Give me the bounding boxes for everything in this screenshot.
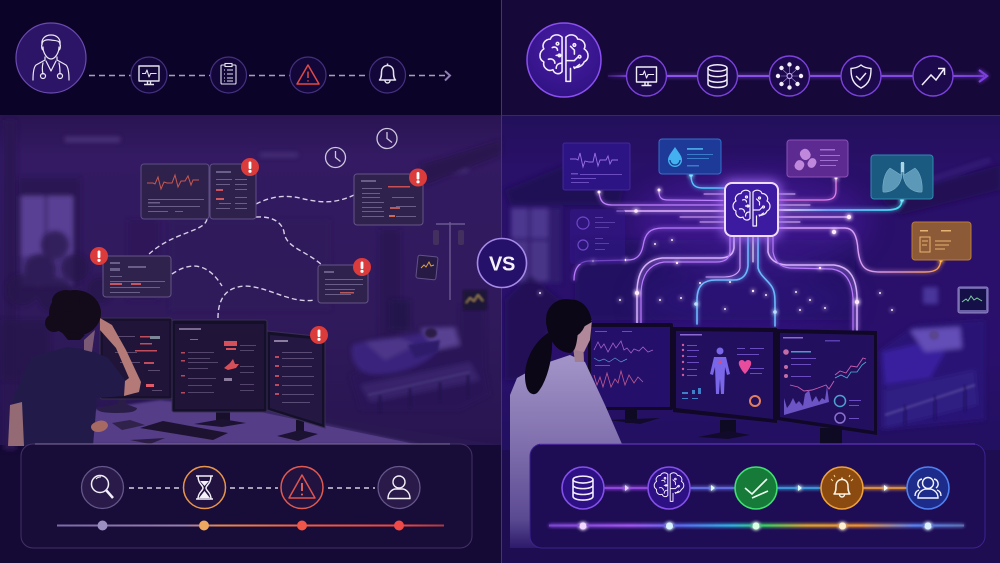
connecting glow line bbox=[608, 70, 987, 82]
icon: user bbox=[378, 466, 420, 508]
card: dim left vitals bbox=[570, 209, 625, 264]
icon: magnifier bbox=[82, 466, 124, 508]
left scene: ICU bed with patient bbox=[350, 290, 490, 412]
icon: warning bbox=[290, 57, 326, 93]
card: ecg data bbox=[563, 143, 630, 190]
card: orange report bbox=[912, 222, 971, 260]
left monitor 2 bbox=[172, 320, 267, 427]
icon: database bbox=[698, 56, 738, 96]
left scene dashed links between records bbox=[148, 195, 354, 318]
left bottom panel: manual delay pipeline bbox=[21, 444, 472, 548]
circuit nodes and sparkles bbox=[539, 173, 943, 314]
card: ecg record bbox=[141, 164, 209, 219]
right monitor 1 bbox=[588, 323, 673, 424]
card: lungs bbox=[871, 155, 933, 199]
right monitor 3 bbox=[777, 329, 877, 444]
card: lower right record with alert bbox=[318, 258, 371, 303]
right header: AI workflow bbox=[527, 23, 987, 97]
glowing connectors bbox=[604, 485, 907, 491]
icon: brain bbox=[648, 467, 690, 509]
card: top right record with alert bbox=[354, 168, 427, 225]
left column background bbox=[0, 0, 501, 563]
right bottom panel: AI pipeline bbox=[530, 444, 985, 548]
AI-assisted clinician bbox=[510, 299, 622, 548]
icon: trend up bbox=[913, 56, 953, 96]
dashed arrow line bbox=[89, 71, 450, 80]
right scene: violet haze around circuit bbox=[630, 172, 870, 335]
card: left record with alert bbox=[90, 247, 171, 297]
icon: doctor bbox=[16, 23, 86, 93]
icon: network bbox=[770, 56, 810, 96]
card: medication bbox=[787, 140, 848, 177]
progress timeline bbox=[549, 522, 964, 530]
card: hydration bbox=[659, 139, 721, 174]
right hospital scene bbox=[505, 160, 1000, 380]
circuit wires from AI core bbox=[574, 175, 941, 330]
card: record details with alert bbox=[210, 158, 259, 219]
left header: doctor workflow bbox=[0, 0, 501, 115]
left hospital scene bbox=[0, 120, 501, 450]
dashed connectors bbox=[129, 487, 375, 489]
icon: monitor bbox=[131, 57, 167, 93]
icon: shield bbox=[841, 56, 881, 96]
icon: monitor bbox=[626, 56, 666, 96]
left monitor 3 bbox=[267, 326, 328, 441]
icon: AI brain bbox=[527, 23, 601, 97]
clock icons bbox=[326, 128, 397, 168]
icon: bell bbox=[370, 57, 406, 93]
comparison divider bbox=[501, 0, 502, 563]
icon: alert bell bbox=[821, 467, 863, 509]
left scene: IV stand and small vitals monitor bbox=[416, 222, 465, 300]
right scene: ICU bed and monitor bbox=[880, 287, 988, 430]
left monitor 1 bbox=[97, 318, 172, 413]
AI core chip bbox=[723, 181, 780, 238]
right monitor 2 bbox=[673, 327, 777, 439]
left desk bbox=[88, 400, 500, 445]
stressed clinician bbox=[8, 290, 141, 446]
VS badge: VS bbox=[489, 254, 515, 276]
right column background bbox=[501, 0, 1000, 563]
icon: database bbox=[562, 467, 604, 509]
icon: clipboard bbox=[210, 57, 246, 93]
icon: hourglass bbox=[184, 466, 226, 508]
progress timeline bbox=[57, 520, 444, 530]
icon: verified check bbox=[735, 467, 777, 509]
icon: warning bbox=[281, 466, 323, 508]
VS badge bbox=[478, 238, 526, 288]
icon: care team bbox=[907, 467, 949, 509]
